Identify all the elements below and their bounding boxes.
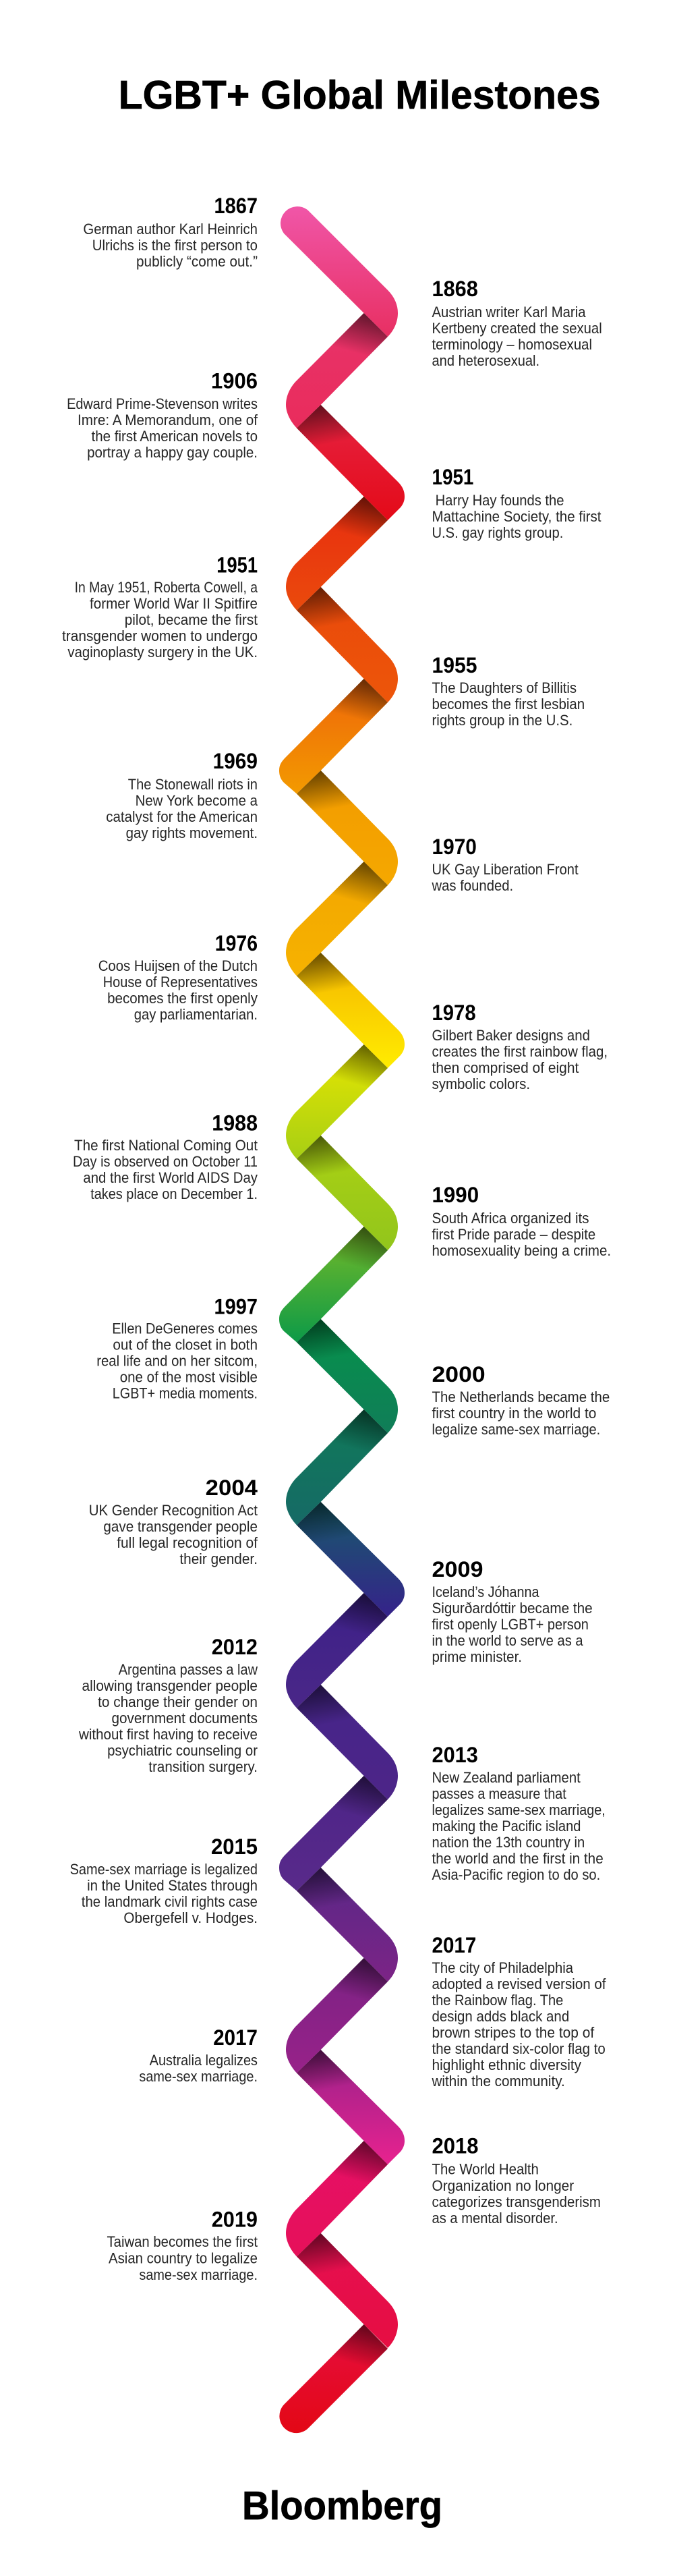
milestone 1868 [432, 277, 602, 369]
description 1997: LGBT+ media moments. [113, 1384, 258, 1402]
description 2013: making the Pacific island [432, 1818, 581, 1835]
description 2019: Taiwan becomes the first [107, 2233, 258, 2250]
description 2013 [432, 1769, 606, 1883]
description 2012: without first having to receive [78, 1726, 258, 1743]
year 2000: 2000 [432, 1362, 486, 1387]
description 2009: in the world to serve as a [432, 1632, 583, 1649]
description 1906 [67, 395, 258, 461]
description 1906: Edward Prime-Stevenson writes [67, 395, 258, 412]
description 1988: and the first World AIDS Day [83, 1169, 258, 1186]
description 2017 Philadelphia: design adds black and [432, 2008, 569, 2025]
year 2017: 2017 [213, 2025, 258, 2050]
description 1951 Cowell [62, 579, 258, 661]
description 1868 [432, 304, 602, 369]
ribbon band 18 [279, 1776, 388, 1891]
title: LGBT+ Global Milestones [119, 73, 601, 117]
year 2017: 2017 [432, 1933, 476, 1957]
description 2000 [432, 1389, 610, 1438]
description 1868: and heterosexual. [432, 352, 539, 369]
description 2017 Philadelphia: the standard six-color flag to [432, 2040, 606, 2057]
description 2015: Same-sex marriage is legalized [70, 1861, 258, 1878]
description 1868: Austrian writer Karl Maria [432, 304, 586, 320]
description 2017 Philadelphia: adopted a revised version of [432, 1976, 606, 1992]
description 2013: Asia-Pacific region to do so. [432, 1866, 600, 1883]
year 2009: 2009 [432, 1557, 483, 1581]
description 2004: full legal recognition of [117, 1534, 258, 1551]
milestone 2012 [78, 1635, 258, 1775]
milestone 2015 [70, 1835, 258, 1926]
description 1970: was founded. [432, 877, 513, 894]
description 1997 [96, 1320, 258, 1402]
description 1970 [432, 861, 579, 894]
ribbon band 4 [286, 497, 388, 610]
description 2012: transition surgery. [148, 1758, 258, 1775]
milestone 2004 [89, 1476, 258, 1567]
year 2012: 2012 [212, 1635, 258, 1659]
description 2004: their gender. [179, 1550, 258, 1567]
ribbon band 11 [297, 1136, 398, 1250]
description 1906: the first American novels to [92, 428, 258, 445]
description 2017 Australia: Australia legalizes [150, 2052, 258, 2069]
milestone 1951 Cowell [62, 553, 258, 661]
description 1978: Gilbert Baker designs and [432, 1027, 590, 1044]
description 2017 Australia [139, 2052, 258, 2085]
description 2018: The World Health [432, 2160, 539, 2178]
year 2013: 2013 [432, 1743, 478, 1767]
year 2019: 2019 [212, 2208, 258, 2232]
year 1976: 1976 [215, 931, 258, 955]
milestone 1997 [96, 1294, 258, 1402]
description 1976: becomes the first openly [107, 990, 258, 1007]
description 1988: The first National Coming Out [74, 1137, 258, 1154]
milestone 1978 [432, 1001, 608, 1092]
milestone 1867 [83, 194, 258, 270]
description 1951 Mattachine [432, 492, 601, 541]
description 2000: first country in the world to [432, 1405, 596, 1422]
ribbon band 19 [297, 1868, 398, 1982]
description 2013: nation the 13th country in [432, 1834, 585, 1851]
description 1970: UK Gay Liberation Front [432, 861, 579, 878]
description 1969: The Stonewall riots in [128, 776, 258, 793]
year 1868: 1868 [432, 277, 478, 301]
description 2012: psychiatric counseling or [107, 1742, 258, 1759]
description 1978: symbolic colors. [432, 1075, 530, 1092]
year 1978: 1978 [432, 1001, 476, 1025]
description 1990: homosexuality being a crime. [432, 1242, 611, 1259]
description 1867 [83, 221, 258, 270]
description 1951 Cowell: vaginoplasty surgery in the UK. [67, 644, 258, 661]
ribbon band 24: ending cap, red [279, 2324, 388, 2433]
description 1969: gay rights movement. [126, 824, 258, 841]
milestone 1970 [432, 835, 579, 894]
description 2000: The Netherlands became the [432, 1389, 610, 1405]
description 1955: becomes the first lesbian [432, 696, 585, 712]
ribbon band 1: starting cap, pink [281, 206, 398, 337]
year 1990: 1990 [432, 1183, 479, 1207]
milestone 1906 [67, 368, 258, 461]
Bloomberg logo wordmark: Bloomberg [242, 2484, 442, 2528]
ribbon band 15 [297, 1502, 405, 1617]
description 2017 Philadelphia: within the community. [432, 2073, 565, 2090]
year 1951: 1951 [216, 553, 258, 578]
ribbon band 12 [279, 1227, 388, 1343]
description 2009: prime minister. [432, 1648, 522, 1665]
zigzag rainbow ribbon [279, 206, 405, 2433]
year 2018: 2018 [432, 2133, 479, 2158]
description 2017 Philadelphia: highlight ethnic diversity [432, 2056, 581, 2073]
description 1997: out of the closet in both [113, 1336, 258, 1353]
description 2004: gave transgender people [103, 1518, 258, 1535]
description 2019: Asian country to legalize [109, 2249, 258, 2267]
description 2017 Philadelphia: The city of Philadelphia [432, 1959, 574, 1976]
milestone 1976 [98, 931, 258, 1023]
description 2018 [432, 2160, 601, 2227]
description 1969 [106, 776, 258, 841]
ribbon band 3 [297, 405, 405, 520]
description 1997: one of the most visible [120, 1368, 258, 1386]
year 1969: 1969 [213, 749, 258, 773]
ribbon band 16 [286, 1593, 388, 1708]
year 1955: 1955 [432, 653, 477, 677]
description 2017 Philadelphia: brown stripes to the top of [432, 2024, 595, 2041]
description 2019 [107, 2233, 258, 2283]
description 2013: passes a measure that [432, 1785, 566, 1802]
ribbon band 10 [286, 1044, 388, 1159]
description 1990: South Africa organized its [432, 1210, 589, 1227]
description 1951 Mattachine: Mattachine Society, the first [432, 508, 601, 525]
description 1906: Imre: A Memorandum, one of [78, 412, 258, 428]
description 1969: New York become a [136, 792, 258, 809]
description 1997: real life and on her sitcom, [96, 1352, 258, 1370]
ribbon band 8 [286, 862, 388, 976]
milestone 2013 [432, 1743, 606, 1883]
milestone 1990 [432, 1183, 611, 1259]
milestone 2017 Australia [139, 2025, 258, 2085]
description 2018: categorizes transgenderism [432, 2193, 601, 2210]
description 1951 Cowell: former World War II Spitfire [90, 595, 258, 612]
ribbon band 2 [286, 313, 388, 428]
milestone 2018 [432, 2133, 601, 2227]
description 1990: first Pride parade – despite [432, 1226, 595, 1243]
description 1988: takes place on December 1. [90, 1185, 258, 1202]
milestone 1951 Mattachine [432, 465, 601, 541]
description 2017 Philadelphia: the Rainbow flag. The [432, 1992, 563, 2009]
milestone 2019 [107, 2208, 258, 2283]
description 1955: rights group in the U.S. [432, 712, 573, 729]
description 2018: Organization no longer [432, 2177, 574, 2194]
description 2012 [78, 1661, 258, 1775]
ribbon band 6 [279, 679, 388, 793]
description 2017 Philadelphia [432, 1959, 606, 2090]
description 2015: Obergefell v. Hodges. [123, 1909, 258, 1926]
description 2012: to change their gender on [98, 1693, 258, 1710]
description 1951 Cowell: transgender women to undergo [62, 627, 258, 644]
description 1978 [432, 1027, 608, 1092]
description 1976: House of Representatives [103, 974, 258, 990]
description 1951 Cowell: pilot, became the first [125, 611, 258, 628]
description 1867: Ulrichs is the first person to [92, 237, 258, 254]
ribbon band 13 [297, 1319, 398, 1433]
description 1906: portray a happy gay couple. [87, 444, 258, 461]
description 1951 Cowell: In May 1951, Roberta Cowell, a [75, 579, 258, 596]
description 1988 [73, 1137, 258, 1202]
description 2000: legalize same-sex marriage. [432, 1421, 600, 1438]
description 1955 [432, 679, 585, 729]
description 1955: The Daughters of Billitis [432, 679, 577, 696]
ribbon band 7 [297, 771, 398, 885]
milestone 2000 [432, 1362, 610, 1438]
milestone 2017 Philadelphia [432, 1933, 606, 2090]
ribbon band 14 [286, 1409, 388, 1525]
description 2012: Argentina passes a law [119, 1661, 258, 1678]
ribbon band 21 [297, 2050, 405, 2164]
year 1997: 1997 [214, 1294, 258, 1318]
ribbon band 17 [297, 1685, 398, 1799]
description 2019: same-sex marriage. [139, 2266, 258, 2283]
description 2004 [89, 1502, 258, 1567]
ribbon band 5 [297, 587, 398, 702]
description 1868: terminology – homosexual [432, 336, 592, 353]
description 1997: Ellen DeGeneres comes [112, 1320, 258, 1337]
milestone 2009 [432, 1557, 593, 1665]
year 1988: 1988 [212, 1111, 258, 1135]
ribbon band 20 [286, 1958, 388, 2073]
description 2015: the landmark civil rights case [82, 1893, 258, 1910]
description 1951 Mattachine: U.S. gay rights group. [432, 524, 563, 541]
year 1951: 1951 [432, 465, 473, 489]
description 1969: catalyst for the American [106, 808, 258, 825]
description 2009: first openly LGBT+ person [432, 1616, 589, 1633]
description 2004: UK Gender Recognition Act [89, 1502, 258, 1519]
description 2013: legalizes same-sex marriage, [432, 1801, 606, 1818]
ribbon band 9 [297, 953, 405, 1068]
description 2009: Sigurðardóttir became the [432, 1600, 593, 1617]
year 1970: 1970 [432, 835, 477, 859]
ribbon band 22 [286, 2141, 388, 2256]
description 2009: Iceland’s Jóhanna [432, 1584, 539, 1600]
description 1868: Kertbeny created the sexual [432, 320, 602, 337]
description 2017 Australia: same-sex marriage. [139, 2068, 258, 2085]
description 2013: New Zealand parliament [432, 1769, 581, 1786]
description 1976: gay parliamentarian. [134, 1006, 258, 1023]
description 1978: creates the first rainbow flag, [432, 1043, 608, 1060]
description 2015: in the United States through [87, 1877, 258, 1894]
description 1976 [98, 957, 258, 1023]
description 2012: government documents [112, 1710, 258, 1727]
year 2015: 2015 [211, 1835, 258, 1859]
description 1867: German author Karl Heinrich [83, 221, 258, 237]
year 2004: 2004 [206, 1476, 258, 1500]
description 1976: Coos Huijsen of the Dutch [98, 957, 258, 974]
milestone 1955 [432, 653, 585, 729]
year 1906: 1906 [211, 368, 258, 393]
description 1978: then comprised of eight [432, 1059, 579, 1076]
ribbon band 23 [297, 2233, 398, 2348]
description 2015 [70, 1861, 258, 1926]
description 1867: publicly “come out.” [136, 253, 258, 270]
description 2012: allowing transgender people [82, 1677, 258, 1694]
description 2018: as a mental disorder. [432, 2210, 558, 2227]
year 1867: 1867 [214, 194, 258, 218]
description 2009 [432, 1584, 593, 1665]
description 1988: Day is observed on October 11 [73, 1153, 258, 1170]
milestone 1988 [73, 1111, 258, 1202]
description 1990 [432, 1210, 611, 1259]
description 1951 Mattachine: Harry Hay founds the [436, 492, 564, 509]
milestone 1969 [106, 749, 258, 841]
description 2013: the world and the first in the [432, 1850, 604, 1867]
